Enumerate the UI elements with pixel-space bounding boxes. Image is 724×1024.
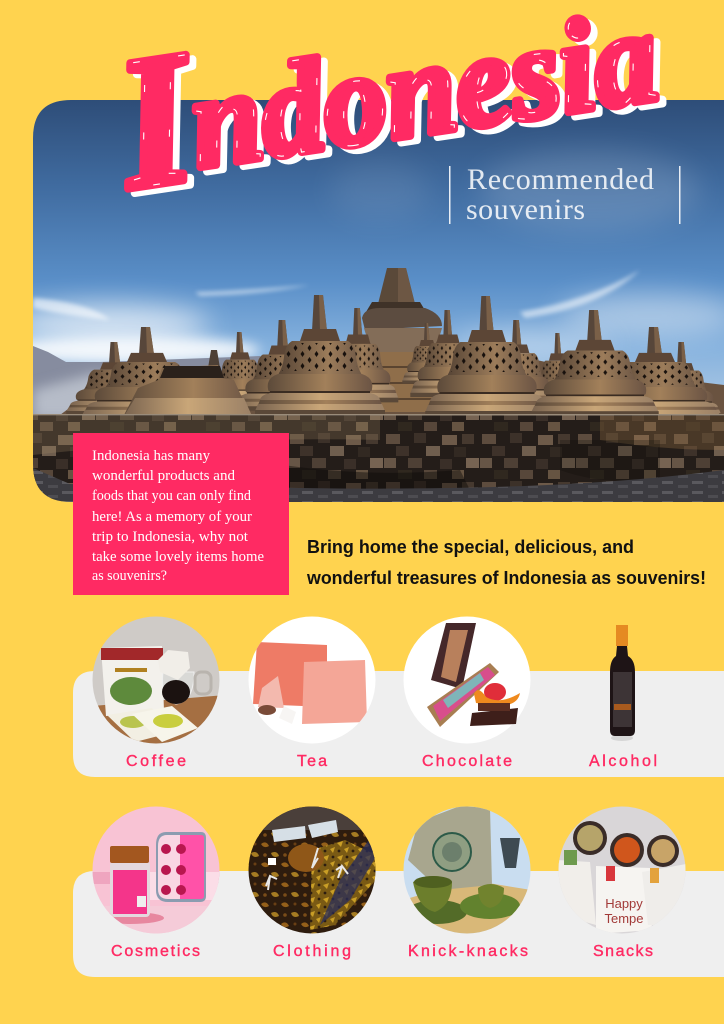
label: Snacks: Snacks bbox=[593, 943, 653, 960]
subtitle: Recommended souvenirs: Recommended bbox=[467, 163, 654, 196]
icon: snacks bbox=[556, 806, 688, 934]
intro panel: wonderful products and bbox=[92, 468, 235, 484]
stone wall bbox=[33, 415, 724, 490]
icon: wine bottle bbox=[610, 625, 635, 741]
intro panel: foods that you can only find bbox=[92, 488, 251, 504]
intro panel: Indonesia has many bbox=[92, 448, 210, 464]
stupas, back row bbox=[677, 342, 721, 414]
label: Clothing: Clothing bbox=[273, 943, 351, 960]
central stupa bbox=[362, 268, 442, 412]
icon: cosmetics bbox=[92, 806, 220, 936]
icon: chocolate bbox=[404, 616, 530, 744]
title: Indonesia bbox=[103, 0, 676, 235]
paving bbox=[33, 468, 724, 502]
headline: Bring home the special, delicious, and bbox=[307, 536, 634, 557]
temple mass bbox=[60, 340, 724, 415]
subtitle: Recommended souvenirs bbox=[449, 163, 680, 226]
label: Tea: Tea bbox=[297, 753, 327, 770]
label: Knick-knacks: Knick-knacks bbox=[408, 943, 528, 960]
title: Indonesia: I bbox=[103, 11, 211, 229]
intro panel: take some lovely items home bbox=[92, 549, 264, 565]
intro panel: here! As a memory of your bbox=[92, 509, 252, 525]
photo: Borobudur temple bbox=[0, 100, 724, 502]
intro panel bbox=[73, 433, 289, 595]
panel: row 2 bbox=[73, 871, 724, 977]
subtitle: Recommended souvenirs: souvenirs bbox=[466, 193, 585, 226]
icon: snacks: Tempe bbox=[604, 911, 644, 926]
icon: snacks: Happy bbox=[605, 896, 643, 911]
label: Chocolate: Chocolate bbox=[422, 753, 512, 770]
intro panel: trip to Indonesia, why not bbox=[92, 529, 249, 545]
icon: coffee bbox=[92, 616, 225, 745]
label: Cosmetics: Cosmetics bbox=[111, 943, 200, 960]
clouds bbox=[0, 150, 724, 364]
distant mountains bbox=[33, 346, 260, 420]
headline: wonderful treasures of Indonesia as souvenirs! bbox=[306, 567, 706, 588]
headline bbox=[306, 536, 706, 588]
icon: clothing bbox=[248, 806, 380, 934]
sky bbox=[33, 100, 724, 385]
label: Coffee: Coffee bbox=[126, 753, 186, 770]
stupas, front row bbox=[82, 327, 180, 414]
icon: knick-knacks bbox=[403, 806, 531, 934]
title: Indonesia: I bbox=[110, 15, 217, 234]
label: Alcohol: Alcohol bbox=[589, 753, 657, 770]
title: Indonesia: I bbox=[103, 11, 211, 229]
icon: tea bbox=[248, 616, 376, 744]
intro panel: as souvenirs? bbox=[92, 568, 167, 584]
panel: row 1 bbox=[73, 671, 724, 777]
